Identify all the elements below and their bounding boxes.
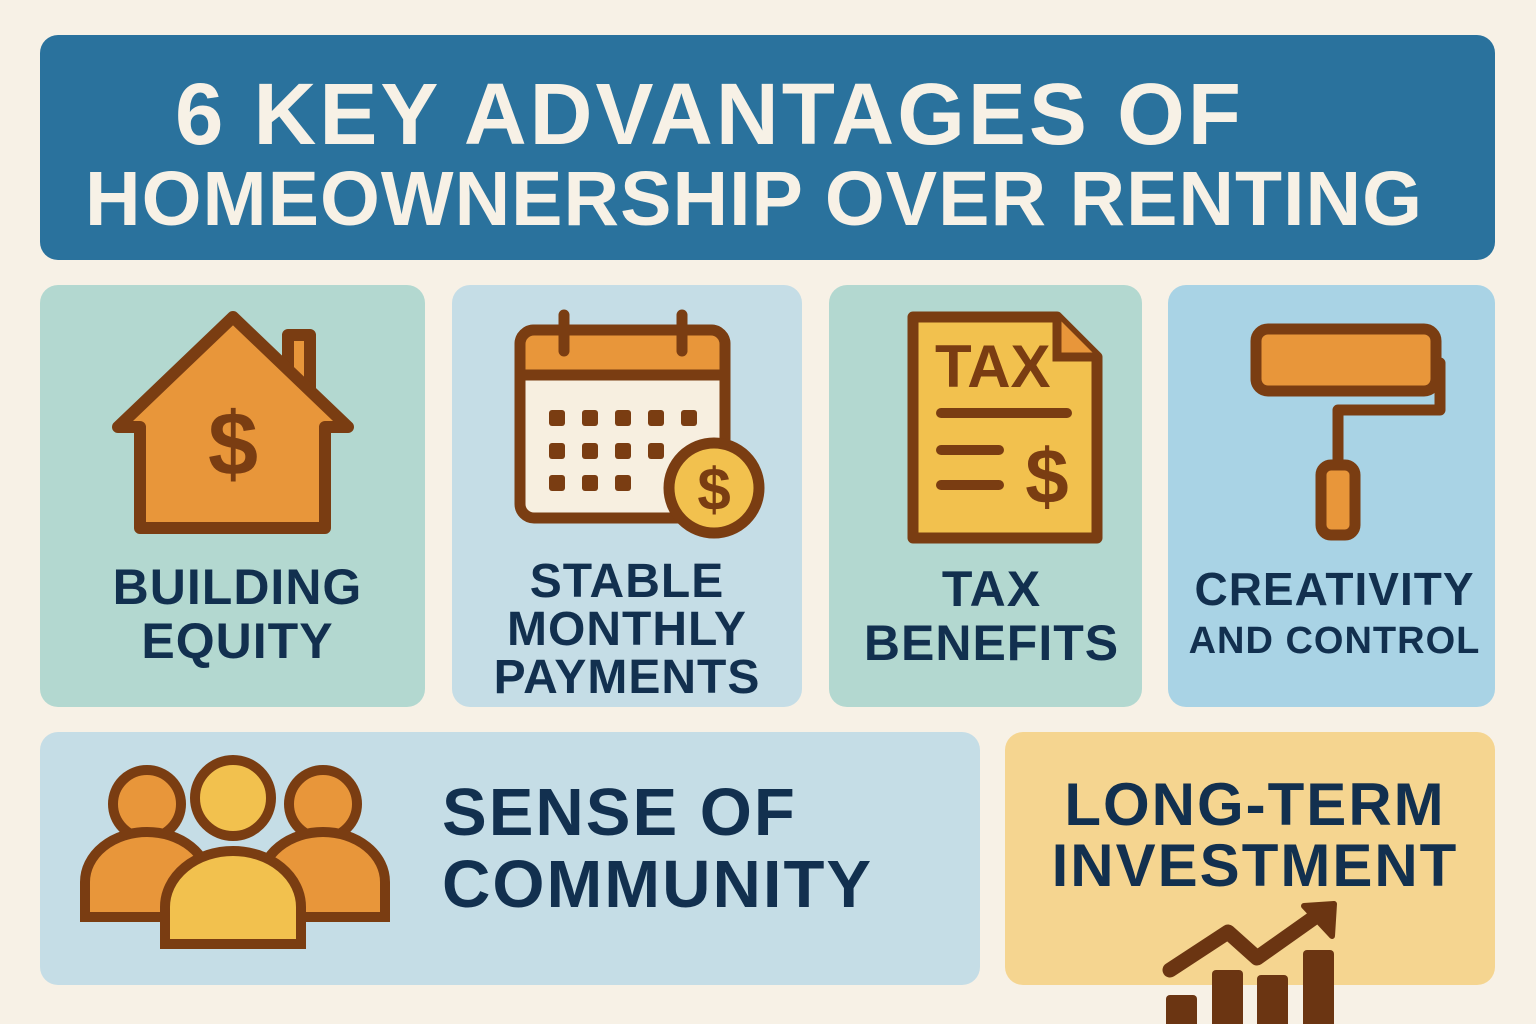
panel: stable monthly payments: [452, 285, 802, 707]
panel: building equity: [40, 285, 425, 707]
label: INVESTMENT: [1052, 832, 1458, 899]
label: EQUITY: [141, 613, 334, 669]
icon: people: [80, 755, 390, 949]
label: CREATIVITY: [1194, 563, 1475, 615]
title text: 6 KEY ADVANTAGES OF: [175, 66, 1244, 163]
title text: [85, 66, 1423, 242]
panel: long-term investment: [1005, 732, 1495, 985]
label: STABLE: [530, 555, 724, 608]
panel: sense of community: [40, 732, 980, 985]
icon: tax document: [908, 312, 1102, 544]
panel: tax benefits: [829, 285, 1142, 707]
label: COMMUNITY: [442, 847, 873, 922]
label: PAYMENTS: [494, 651, 760, 704]
label: AND CONTROL: [1189, 620, 1480, 662]
label: LONG-TERM: [1064, 771, 1446, 838]
label: [864, 561, 1119, 671]
title text: HOMEOWNERSHIP OVER RENTING: [85, 156, 1423, 242]
label: [113, 559, 362, 669]
title banner: [40, 35, 1495, 260]
label: [1052, 771, 1458, 899]
label: BUILDING: [113, 559, 362, 615]
icon: tax document: TAX: [935, 333, 1051, 400]
icon: paint roller: [1250, 324, 1446, 540]
icon: house with dollar: [112, 311, 354, 534]
label: [442, 775, 873, 922]
icon: tax document: $: [1025, 432, 1069, 520]
icon: calendar with coin: [514, 310, 764, 538]
label: [1189, 563, 1480, 662]
label: SENSE OF: [442, 775, 797, 850]
label: BENEFITS: [864, 615, 1119, 671]
icon: calendar with coin: $: [697, 456, 731, 523]
label: MONTHLY: [507, 603, 747, 656]
panel: creativity and control: [1168, 285, 1495, 707]
icon: house with dollar: $: [208, 395, 258, 495]
label: [494, 555, 760, 704]
label: TAX: [942, 561, 1041, 617]
